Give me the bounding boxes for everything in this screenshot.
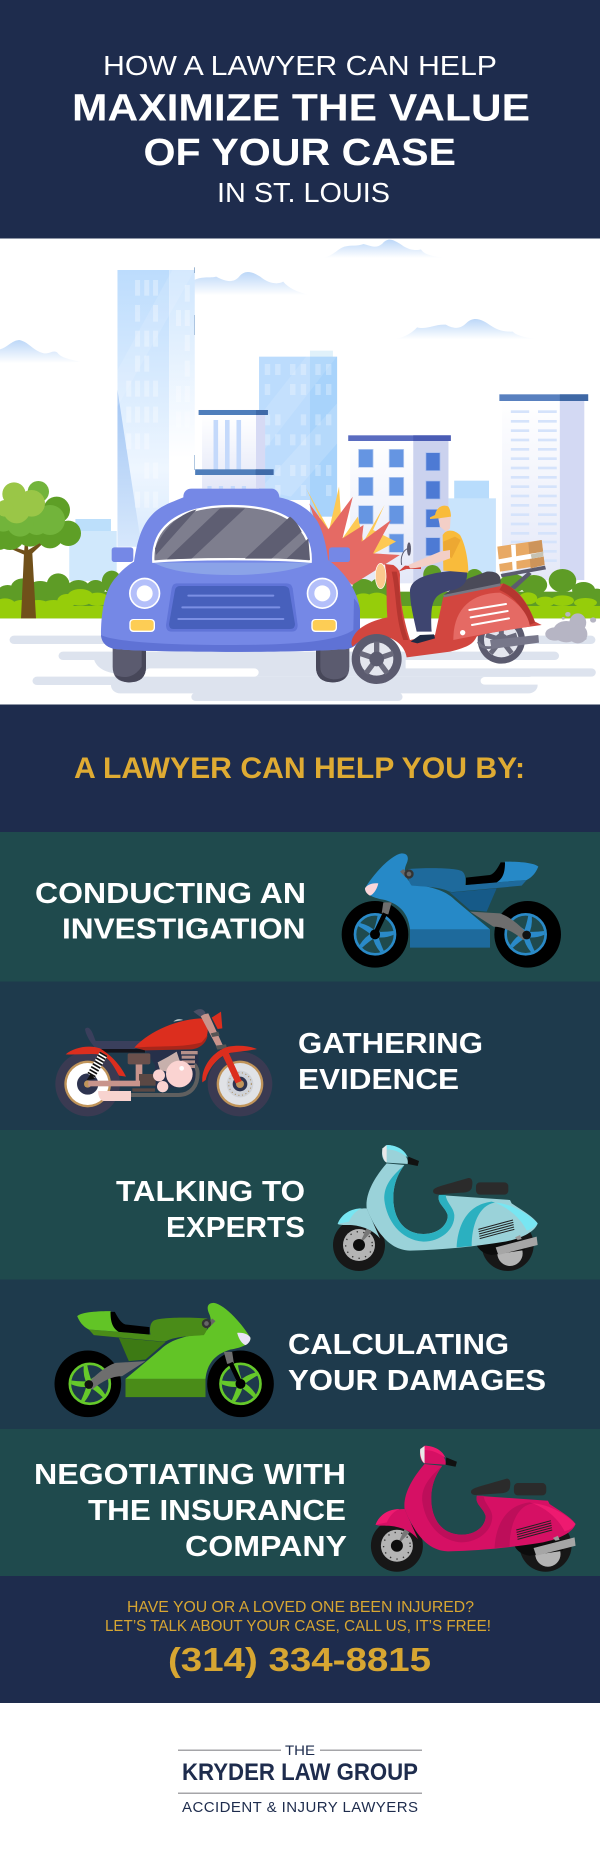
clouds — [0, 240, 536, 363]
title line: how a lawyer can help: HOW A LAWYER CAN HELP — [103, 50, 497, 81]
row text: EXPERTS — [166, 1212, 305, 1244]
smoke — [545, 612, 596, 643]
blue window apartment — [348, 435, 451, 583]
small white building — [195, 410, 274, 489]
row text: THE INSURANCE — [88, 1495, 346, 1527]
icon: teal scooter — [333, 1145, 538, 1271]
icon: red cruiser motorcycle — [55, 1009, 272, 1116]
delivery scooter with rider — [351, 506, 546, 684]
call to action text: HAVE YOU OR A LOVED ONE BEEN INJURED? — [127, 1599, 474, 1616]
section heading band — [0, 704, 600, 832]
row 2: gathering evidence — [0, 982, 600, 1130]
row text — [35, 878, 306, 946]
header panel — [0, 0, 600, 238]
front wheel — [352, 634, 402, 684]
headlight and handlebar — [375, 563, 386, 589]
row text: YOUR DAMAGES — [288, 1365, 546, 1397]
rider legs and seat — [443, 572, 501, 595]
call to action text — [105, 1599, 491, 1635]
row 5: negotiating with the insurance company — [0, 1429, 600, 1576]
exhaust — [478, 642, 492, 648]
background buildings — [69, 351, 496, 581]
call to action text: LET’S TALK ABOUT YOUR CASE, CALL US, IT’S FREE! — [105, 1618, 491, 1635]
section heading: A LAWYER CAN HELP YOU BY: — [74, 752, 525, 785]
title line: of your case: OF YOUR CASE — [144, 132, 456, 174]
striped tower at right — [499, 394, 588, 580]
row 4: calculating your damages — [0, 1280, 600, 1429]
box and rack — [497, 540, 546, 589]
tree — [0, 481, 81, 618]
title line: in st. louis: IN ST. LOUIS — [217, 177, 390, 208]
hedges — [0, 565, 600, 618]
row text: GATHERING — [298, 1028, 483, 1060]
icon: blue sport motorcycle — [342, 853, 561, 968]
row text — [116, 1176, 305, 1244]
logo text: accident and injury lawyers: ACCIDENT & INJURY LAWYERS — [182, 1799, 418, 1816]
row text: EVIDENCE — [298, 1064, 459, 1096]
logo text: the: THE — [285, 1742, 315, 1758]
row text: TALKING TO — [116, 1176, 305, 1208]
row text — [298, 1028, 483, 1096]
rear wheel — [478, 616, 525, 664]
row 1: conducting an investigation — [0, 832, 600, 982]
road — [10, 636, 596, 701]
scooter body — [351, 564, 542, 657]
tall glass tower — [117, 267, 195, 547]
impact burst — [306, 487, 400, 585]
row text — [34, 1459, 347, 1563]
row text: CALCULATING — [288, 1329, 509, 1361]
hero illustration: car and scooter collision — [0, 238, 600, 704]
logo text: kryder law group: KRYDER LAW GROUP — [182, 1759, 418, 1786]
row text: COMPANY — [185, 1531, 347, 1563]
car — [101, 489, 360, 682]
rider torso and arm — [443, 531, 468, 573]
footer logo — [0, 1703, 600, 1862]
row text: INVESTIGATION — [62, 914, 306, 946]
row 3: talking to experts — [0, 1130, 600, 1280]
row text — [288, 1329, 546, 1397]
row text: CONDUCTING AN — [35, 878, 306, 910]
call to action panel — [0, 1576, 600, 1703]
rider head and helmet — [438, 517, 451, 532]
windshield — [153, 506, 311, 562]
phone number: (314) 334-8815 — [168, 1641, 431, 1678]
icon: green sport motorcycle — [55, 1303, 274, 1417]
title line: maximize the value: MAXIMIZE THE VALUE — [72, 88, 530, 130]
icon: pink scooter — [371, 1446, 576, 1572]
row text: NEGOTIATING WITH — [34, 1459, 346, 1491]
